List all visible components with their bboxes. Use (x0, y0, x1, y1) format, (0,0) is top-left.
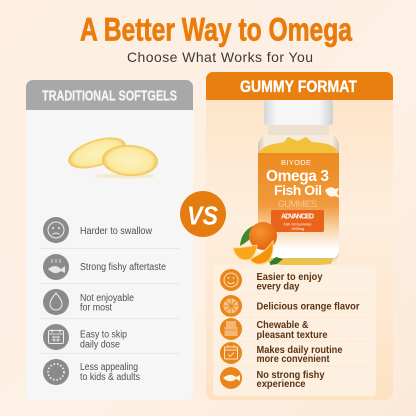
header: traditional softgels (26, 80, 193, 110)
row: easy to skip daily dose: daily dose (80, 340, 120, 350)
row: strong fishy aftertaste (43, 254, 166, 280)
vs badge (180, 191, 226, 237)
row: less appealing to kids and adults: to kids & adults (80, 372, 140, 383)
bottle label: BIYODE (281, 158, 311, 167)
subtitle: Choose What Works for You (127, 49, 313, 65)
bottle label: Fish Oil (274, 182, 322, 198)
bottle cap (264, 100, 333, 125)
softgel capsules (64, 131, 159, 178)
benefit: delicious orange flavor (220, 295, 360, 317)
row: harder to swallow: Harder to swallow (80, 226, 153, 237)
benefit: daily routine (220, 342, 343, 365)
bottle label (258, 153, 340, 258)
row: less appealing to kids and adults (43, 359, 140, 385)
benefit: easier to enjoy (220, 269, 323, 292)
product bottle (233, 100, 340, 266)
benefit: no strong fishy experience: experience (256, 378, 306, 390)
row: harder to swallow (43, 217, 153, 243)
row: easy to skip daily dose: Easy to skip (80, 330, 127, 340)
row: not enjoyable for most: for most (80, 302, 112, 314)
bottle label: Omega 3 (266, 168, 329, 185)
benefit: delicious orange flavor: Delicious orange flavor (256, 300, 360, 312)
bottle body (258, 133, 339, 265)
panel: traditional softgels (26, 80, 193, 400)
header: gummy format (206, 72, 393, 100)
benefit: chewable and pleasant texture: pleasant texture (256, 329, 328, 341)
row: not enjoyable for most: Not enjoyable (80, 293, 134, 304)
benefit: no strong fishy experience (220, 367, 325, 390)
row: easy to skip daily dose (43, 324, 127, 350)
benefit: daily routine: Makes daily routine (256, 344, 343, 356)
benefit: easier to enjoy: Easier to enjoy (256, 271, 323, 283)
vs badge: VS (187, 200, 219, 230)
header: traditional softgels: TRADITIONAL SOFTGELS (42, 88, 177, 104)
benefit: chewable and pleasant texture (220, 318, 328, 341)
benefit: no strong fishy experience: No strong fishy (256, 369, 325, 381)
row: not enjoyable for most (43, 289, 134, 315)
benefit: daily routine: more convenient (256, 353, 330, 365)
bottle label: 1000mg (291, 227, 304, 231)
bottle label: Fish Oil Gummies (284, 222, 312, 226)
panel: gummy format (206, 72, 393, 400)
oranges (233, 222, 283, 265)
benefits card (213, 265, 376, 396)
row: less appealing to kids and adults: Less appealing (80, 362, 138, 373)
bottle label: ADVANCED (281, 214, 314, 220)
bottle label: GUMMIES (278, 199, 317, 209)
benefit: easier to enjoy: every day (256, 280, 300, 292)
header: gummy format: GUMMY FORMAT (240, 77, 358, 96)
row: strong fishy aftertaste: Strong fishy aftertaste (80, 262, 166, 273)
benefit: chewable and pleasant texture: Chewable & (256, 319, 309, 331)
